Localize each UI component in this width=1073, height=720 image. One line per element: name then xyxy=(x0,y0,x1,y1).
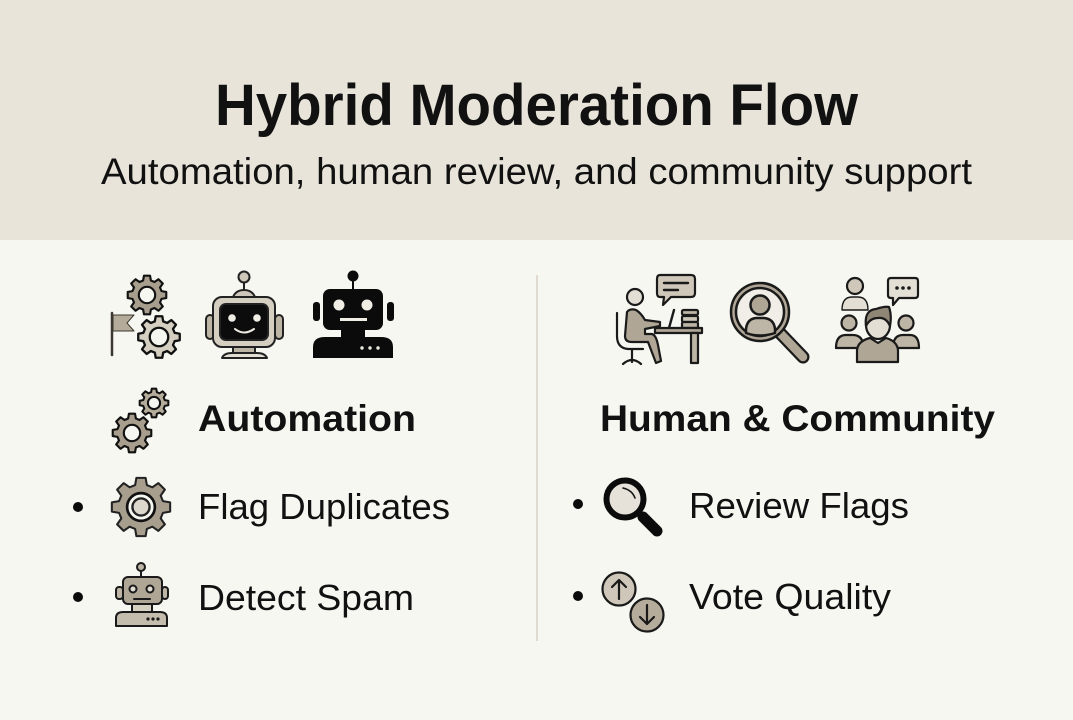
icon: smiling robot xyxy=(206,272,283,358)
icon: up and down vote arrows xyxy=(602,572,664,632)
bullet: vote quality xyxy=(573,572,891,632)
header band xyxy=(0,0,1073,240)
label: flag duplicates: Flag Duplicates xyxy=(198,486,450,527)
subtitle: Automation, human review, and community support xyxy=(101,151,973,192)
icon: flag with gears xyxy=(112,276,180,358)
bullet: detect spam xyxy=(73,563,414,626)
icon: small robot xyxy=(116,563,168,626)
icon: gear xyxy=(112,478,170,536)
heading: automation: Automation xyxy=(198,398,416,439)
icon: black robot xyxy=(313,270,394,358)
icon: community group xyxy=(836,278,919,362)
bullet: flag duplicates xyxy=(73,478,450,536)
icon: magnifier xyxy=(606,480,657,531)
panel: human and community xyxy=(573,275,995,632)
label: vote quality: Vote Quality xyxy=(689,576,891,617)
icon: automation gears xyxy=(113,389,168,452)
bullet: review flags xyxy=(573,480,909,531)
label: detect spam: Detect Spam xyxy=(198,577,414,618)
column divider xyxy=(536,275,538,641)
title: Hybrid Moderation Flow xyxy=(215,73,859,138)
icon: magnifier with person xyxy=(731,283,803,357)
label: review flags: Review Flags xyxy=(689,485,909,526)
icon: person at desk xyxy=(617,275,702,364)
heading: human and community: Human & Community xyxy=(600,398,995,439)
panel: automation xyxy=(73,270,450,626)
